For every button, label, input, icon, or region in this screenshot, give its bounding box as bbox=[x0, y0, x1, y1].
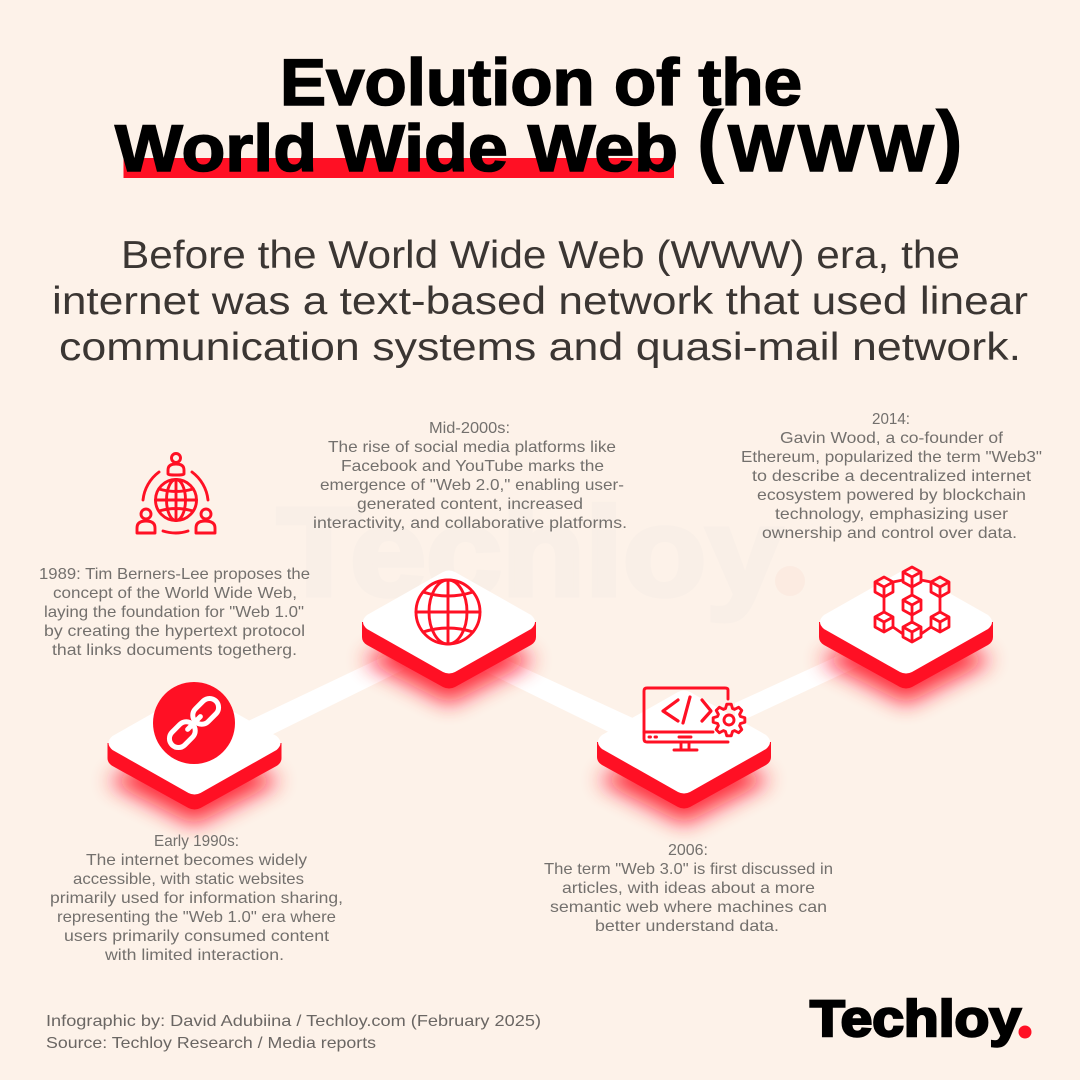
logo: Techloy: Techloy bbox=[810, 990, 1022, 1047]
icon: globe bbox=[416, 580, 480, 644]
text: 2006 bbox=[544, 842, 833, 935]
text: Mid-2000s: Mid-2000s: bbox=[429, 420, 510, 437]
footer credits bbox=[46, 1013, 541, 1052]
intro paragraph: Before the World Wide Web (WWW) era, the bbox=[121, 234, 960, 277]
platform 2 bbox=[362, 570, 536, 688]
text: 2014: Ethereum, popularized the term "Web3" bbox=[741, 449, 1042, 466]
text: Mid-2000s: emergence of "Web 2.0," enabling user- bbox=[320, 477, 624, 494]
title line 2 suffix: ( bbox=[697, 95, 724, 184]
text: Early 1990s: primarily used for information sharing, bbox=[50, 890, 343, 907]
text: Early 1990s: with limited interaction. bbox=[104, 947, 284, 964]
text: 1989: that links documents togetherg. bbox=[52, 642, 297, 659]
text: 2014 bbox=[741, 411, 1042, 542]
platform glows bbox=[108, 616, 992, 825]
icon: people around globe bbox=[137, 454, 215, 533]
text: 2006: articles, with ideas about a more bbox=[562, 880, 815, 897]
title line 2 suffix: ) bbox=[936, 95, 963, 184]
text: Early 1990s bbox=[50, 833, 343, 964]
text: Early 1990s: representing the "Web 1.0" era where bbox=[57, 909, 336, 926]
intro paragraph: communication systems and quasi-mail network. bbox=[59, 326, 1021, 369]
text: 2006: semantic web where machines can bbox=[550, 899, 827, 916]
text: 2014: ownership and control over data. bbox=[762, 525, 1017, 542]
icon: code monitor with gear bbox=[644, 688, 745, 750]
platform 3 bbox=[597, 690, 771, 808]
icon: blockchain cubes bbox=[875, 567, 949, 642]
text: Mid-2000s: generated content, increased bbox=[357, 496, 583, 513]
text: Mid-2000s bbox=[313, 420, 627, 532]
text: 2014: 2014: bbox=[872, 411, 910, 428]
text: 1989: by creating the hypertext protocol bbox=[44, 623, 305, 640]
text: Early 1990s: Early 1990s: bbox=[154, 833, 239, 850]
text: 2006: 2006: bbox=[668, 842, 708, 859]
text: 1989: laying the foundation for "Web 1.0" bbox=[44, 604, 304, 621]
text: 2014: Gavin Wood, a co-founder of bbox=[780, 430, 1004, 447]
platform 1 bbox=[108, 692, 282, 810]
text: 1989 bbox=[39, 566, 310, 659]
text: Early 1990s: The internet becomes widely bbox=[86, 852, 307, 869]
text: 1989: concept of the World Wide Web, bbox=[53, 585, 297, 602]
text: 1989: 1989: Tim Berners-Lee proposes the bbox=[39, 566, 310, 583]
icon: chain link in red circle bbox=[153, 682, 235, 764]
text: Early 1990s: accessible, with static websites bbox=[73, 871, 304, 888]
footer credits: Infographic by: David Adubiina / Techloy.com (February 2025) bbox=[46, 1013, 541, 1030]
text: 2014: to describe a decentralized internet bbox=[752, 468, 1032, 485]
intro paragraph bbox=[52, 234, 1028, 369]
text: 2006: The term "Web 3.0" is first discussed in bbox=[544, 861, 833, 878]
watermark: Techloy: Techloy bbox=[277, 483, 782, 622]
text: 2006: better understand data. bbox=[595, 918, 779, 935]
title bbox=[115, 45, 963, 186]
text: Early 1990s: users primarily consumed content bbox=[64, 928, 330, 945]
title line 2: World Wide Web bbox=[115, 111, 678, 185]
text: 2014: ecosystem powered by blockchain bbox=[757, 487, 1026, 504]
text: Mid-2000s: The rise of social media platforms like bbox=[328, 439, 616, 456]
text: Mid-2000s: Facebook and YouTube marks the bbox=[341, 458, 604, 475]
title line 1: Evolution of the bbox=[280, 45, 802, 119]
text: 2014: technology, emphasizing user bbox=[775, 506, 1009, 523]
title highlight bar bbox=[124, 158, 674, 178]
intro paragraph: internet was a text-based network that used linear bbox=[52, 280, 1028, 323]
connector bands bbox=[225, 655, 868, 748]
platform 4 bbox=[819, 570, 993, 688]
title line 2 suffix bbox=[697, 95, 963, 186]
text: Mid-2000s: interactivity, and collaborative platforms. bbox=[313, 515, 627, 532]
title line 2 suffix: WWW bbox=[728, 112, 935, 186]
footer credits: Source: Techloy Research / Media reports bbox=[46, 1035, 376, 1052]
